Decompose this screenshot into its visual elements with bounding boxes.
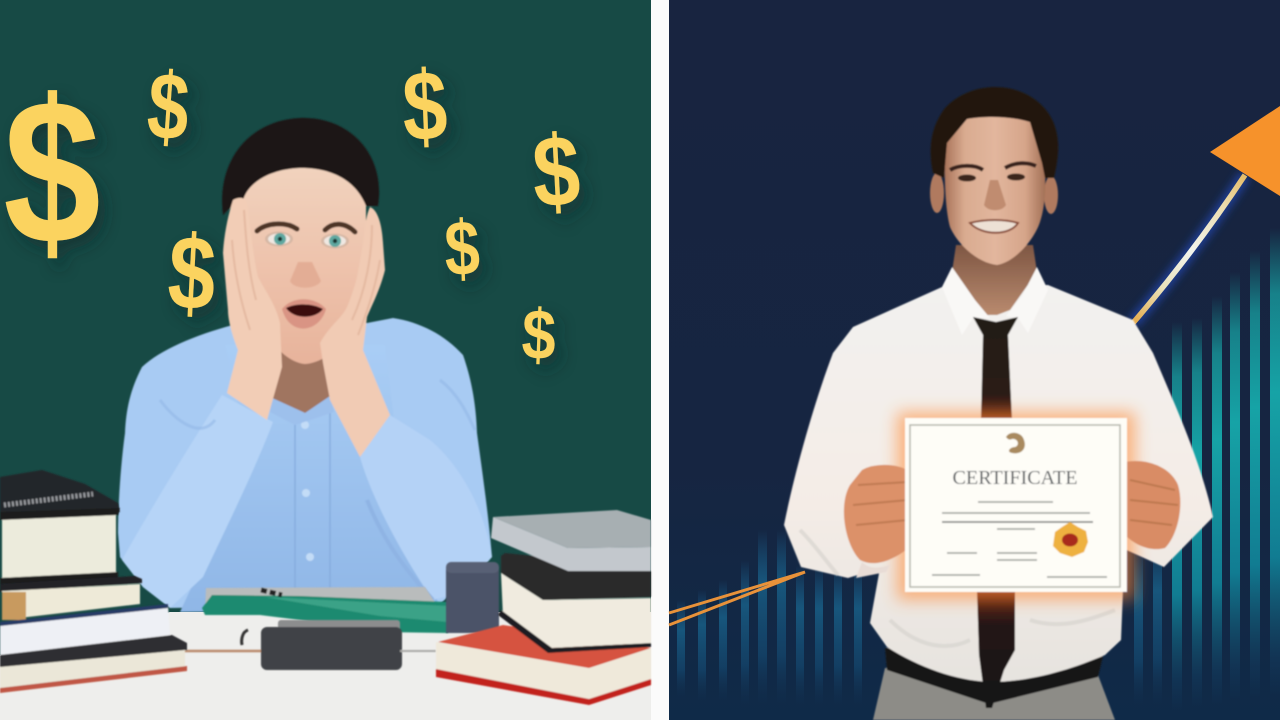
- left hand: [844, 465, 912, 563]
- hands holding certificate: [844, 461, 1180, 578]
- white book: [0, 605, 170, 656]
- dollar signs floating: $: [443, 205, 481, 293]
- ears: [930, 173, 1058, 214]
- dollar signs floating: $: [165, 214, 219, 333]
- dollar signs floating: $: [401, 50, 449, 163]
- chest with placket: [180, 345, 440, 612]
- left hand on cheek: [223, 198, 282, 420]
- eyebrows: [257, 224, 355, 232]
- certificate emblem: [1006, 433, 1025, 453]
- hair: [222, 118, 379, 215]
- right hand: [1125, 461, 1180, 549]
- neck: [262, 340, 345, 413]
- nose: [290, 262, 321, 288]
- small cream book: [0, 576, 142, 592]
- smile: [970, 220, 1018, 233]
- chart: teal bars on right side: [1134, 228, 1280, 712]
- shirt fold shadows: [800, 530, 1115, 646]
- dollar signs floating: $: [3, 57, 101, 287]
- folder on desk: [202, 587, 448, 633]
- person: smiling graduate: [784, 87, 1213, 720]
- dark covered book: [0, 635, 187, 668]
- belt: [885, 648, 1104, 704]
- arrow: orange lines from left: [669, 572, 805, 625]
- red book: [436, 642, 651, 700]
- dollar signs floating: $: [530, 114, 583, 229]
- cup holder: [446, 562, 499, 633]
- eyes: [265, 232, 349, 248]
- right hand finger shadows: [352, 225, 380, 335]
- spiral notebook: [0, 470, 120, 518]
- arrow: rising trend line: [1133, 106, 1280, 323]
- face: [243, 168, 366, 364]
- hair: [931, 87, 1058, 178]
- eyes and brows: [950, 163, 1036, 182]
- calculator: [183, 620, 436, 670]
- certificate: [905, 418, 1127, 592]
- dollar signs floating: [3, 50, 583, 376]
- left hand finger shadows: [232, 210, 256, 330]
- chart: blue bars on lower left: [677, 530, 862, 710]
- trousers: [873, 668, 1115, 720]
- middle book: [501, 573, 651, 648]
- neck: [952, 245, 1037, 315]
- necktie upper: [973, 317, 1018, 420]
- stack of books: left: [0, 470, 187, 693]
- left sleeve forearm: [122, 395, 273, 608]
- desk: [0, 612, 651, 720]
- stack of books: right: [436, 510, 651, 705]
- right sleeve forearm: [360, 415, 492, 600]
- dollar signs floating: $: [144, 53, 192, 162]
- certificate title: CERTIFICATE: [952, 467, 1078, 489]
- thick cream book: [2, 514, 116, 578]
- divider: white gap: [651, 0, 669, 720]
- certificate glow: [897, 412, 1135, 600]
- mouth: [282, 299, 326, 329]
- person: stressed student: [118, 118, 492, 612]
- right hand on cheek: [320, 207, 390, 457]
- head: [945, 115, 1045, 265]
- certificate small lines: [932, 502, 1107, 577]
- top grey book: [491, 517, 651, 571]
- dollar signs floating: $: [520, 295, 557, 376]
- collar: [270, 396, 334, 425]
- panel: left green background: [0, 0, 651, 720]
- necktie lower: [977, 590, 1015, 708]
- collar: [942, 267, 1048, 335]
- shirt: [784, 285, 1213, 682]
- shirt buttons: [301, 421, 314, 561]
- left cuff: [856, 562, 890, 578]
- panel: right navy background: [669, 0, 1280, 720]
- certificate seal: [1053, 522, 1088, 557]
- shirt body: [118, 318, 492, 608]
- nose: [984, 180, 1006, 210]
